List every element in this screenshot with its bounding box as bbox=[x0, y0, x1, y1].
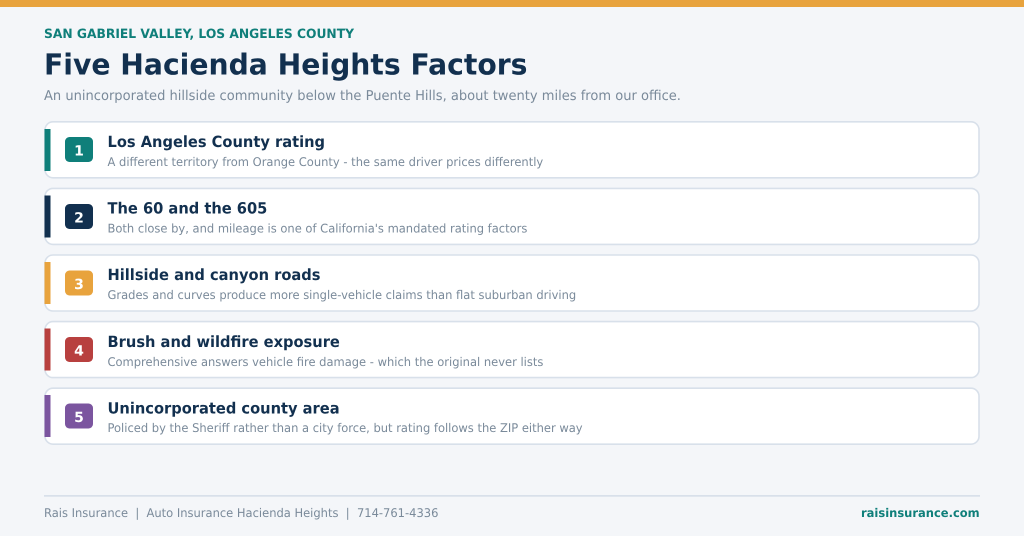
title: Five Hacienda Heights Factors bbox=[44, 48, 527, 82]
top accent bar bbox=[0, 0, 1024, 7]
badge 4: 4 bbox=[74, 344, 84, 360]
heading 4: Brush and wildfire exposure bbox=[107, 333, 340, 351]
accent bar 4 bbox=[44, 328, 50, 370]
badge 3: 3 bbox=[74, 277, 84, 293]
heading 5: Unincorporated county area bbox=[107, 399, 340, 417]
badge 2: 2 bbox=[74, 210, 84, 226]
accent bar 2 bbox=[44, 196, 50, 238]
badge 5: 5 bbox=[74, 410, 84, 426]
heading 3: Hillside and canyon roads bbox=[107, 266, 320, 284]
badge 3 bbox=[65, 270, 93, 296]
badge 1: 1 bbox=[74, 144, 84, 160]
panel: factor 1 bbox=[44, 122, 979, 178]
description 4: Comprehensive answers vehicle fire damage - which the original never lists bbox=[107, 355, 543, 369]
description 5: Policed by the Sheriff rather than a city force, but rating follows the ZIP either way bbox=[107, 421, 583, 435]
panel: factor 2 bbox=[44, 188, 979, 244]
accent bar 1 bbox=[44, 129, 50, 171]
accent bar 5 bbox=[44, 395, 50, 437]
heading 1: Los Angeles County rating bbox=[107, 133, 325, 151]
panel: factor 3 bbox=[44, 255, 979, 311]
badge 1 bbox=[65, 137, 93, 162]
panel: factor 5 bbox=[44, 388, 979, 444]
accent bar 3 bbox=[44, 262, 50, 304]
panel: factor 4 bbox=[44, 322, 979, 378]
eyebrow: SAN GABRIEL VALLEY, LOS ANGELES COUNTY bbox=[44, 27, 355, 42]
badge 5 bbox=[65, 404, 93, 428]
footer right: raisinsurance.com bbox=[861, 506, 980, 520]
heading 2: The 60 and the 605 bbox=[107, 200, 267, 218]
description 2: Both close by, and mileage is one of California's mandated rating factors bbox=[107, 222, 527, 236]
footer left: Rais Insurance | Auto Insurance Hacienda Heights | 714-761-4336 bbox=[44, 506, 438, 520]
description 1: A different territory from Orange County - the same driver prices differently bbox=[107, 155, 543, 169]
badge 2 bbox=[65, 204, 93, 229]
badge 4 bbox=[65, 337, 93, 362]
subtitle: An unincorporated hillside community below the Puente Hills, about twenty miles from our office. bbox=[44, 88, 681, 104]
description 3: Grades and curves produce more single-vehicle claims than flat suburban driving bbox=[107, 288, 576, 302]
